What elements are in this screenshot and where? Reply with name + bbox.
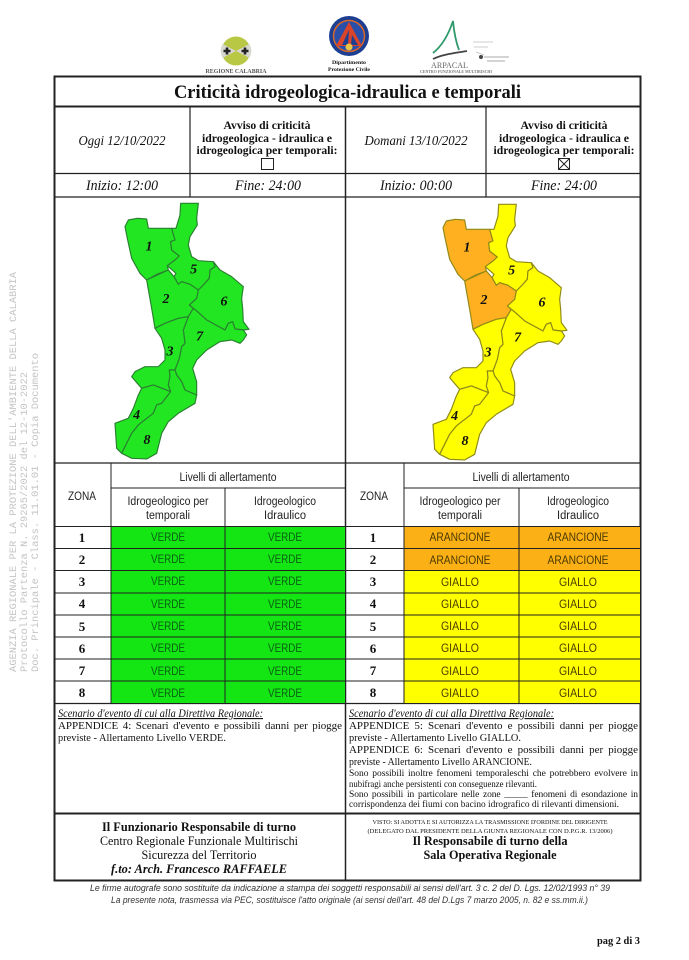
level values: hydrogeological for storms: VERDE [151, 554, 185, 566]
zone numbers: 3 [370, 574, 377, 589]
level values: hydrogeological for storms: VERDE [151, 599, 185, 611]
level values: hydrogeological hydraulic: VERDE [268, 643, 302, 655]
level values: hydrogeological hydraulic: VERDE [268, 688, 302, 700]
level values: hydrogeological hydraulic: GIALLO [559, 621, 597, 633]
map: tomorrow, zones 1-2 orange, others yellow: 1 [463, 241, 470, 256]
panel: scenario tomorrow: nubifragi anche persistenti con conseguenze rilevanti. [349, 779, 537, 790]
zone numbers: 2 [370, 552, 376, 567]
panel: today header [78, 120, 338, 194]
zone numbers: 6 [79, 641, 86, 656]
map: today, all zones green: 2 [161, 292, 169, 307]
watermark: protocol stamp: Doc. Principale - Class. 11.01.01 - Copia Documento [30, 353, 42, 672]
notice: tomorrow: idrogeologica per temporali: [494, 145, 634, 157]
notice: today: Avviso di criticità [224, 120, 311, 132]
level values: hydrogeological for storms: GIALLO [441, 621, 479, 633]
notice: tomorrow: idrogeologica - idraulica e [499, 133, 629, 145]
zone numbers: 5 [79, 619, 86, 634]
table header: Livelli di allertamento [472, 472, 570, 484]
watermark: protocol stamp [8, 271, 42, 672]
notice: today: idrogeologica per temporali: [196, 145, 338, 157]
panel: signature left: Centro Regionale Funzionale Multirischi [100, 834, 299, 848]
level values: hydrogeological hydraulic: GIALLO [559, 577, 597, 589]
panel: signature right: Sala Operativa Regionale [424, 848, 557, 862]
panel: scenario tomorrow: corrispondenza dei fiumi con bacino idrografico di rilevanti dimensioni. [349, 799, 619, 810]
panel: scenario tomorrow: previste - Allertamento Livello GIALLO. [349, 732, 521, 744]
map: tomorrow, zones 1-2 orange, others yellow: 3 [483, 345, 491, 360]
end time: tomorrow: Fine: 24:00 [530, 178, 598, 194]
level values: hydrogeological hydraulic [548, 532, 609, 700]
panel: signature right [368, 819, 612, 862]
date: today: Oggi 12/10/2022 [78, 133, 166, 148]
table header: Idraulico [264, 510, 306, 522]
logo: ARPACAL: CENTRO FUNZIONALE MULTIRISCHI [420, 69, 492, 74]
footnote [90, 883, 611, 906]
panel: scenario tomorrow: Scenario d'evento di cui alla Direttiva Regionale: [349, 708, 554, 720]
panel: signature right: Il Responsabile di turno della [412, 834, 568, 848]
map: tomorrow, zones 1-2 orange, others yellow [433, 204, 567, 460]
table header: Idrogeologico [547, 496, 609, 508]
logo: ARPACAL: ARPACAL [431, 61, 468, 70]
map: tomorrow, zones 1-2 orange, others yellow: 6 [538, 296, 545, 311]
date: tomorrow: Domani 13/10/2022 [364, 133, 468, 148]
level values: hydrogeological for storms: GIALLO [441, 643, 479, 655]
level values: hydrogeological for storms: VERDE [151, 576, 185, 588]
map: today, all zones green: 5 [190, 263, 197, 278]
level values: hydrogeological hydraulic: GIALLO [559, 666, 597, 678]
map: today, all zones green [115, 203, 249, 459]
logo: Regione Calabria: REGIONE CALABRIA [206, 68, 267, 75]
page number: pag 2 di 3 [597, 936, 640, 947]
panel: scenario tomorrow [349, 708, 638, 810]
table: tomorrow alert levels [345, 463, 640, 703]
level values: hydrogeological for storms: VERDE [151, 532, 185, 544]
level values: hydrogeological hydraulic: GIALLO [559, 599, 597, 611]
panel: signature left: Sicurezza del Territorio [142, 848, 256, 862]
panel: scenario tomorrow: Sono possibili inoltre fenomeni temporaleschi che potrebbero evolvere in [349, 768, 638, 779]
level values: hydrogeological hydraulic: VERDE [268, 532, 302, 544]
panel: scenario today: Scenario d'evento di cui alla Direttiva Regionale: [58, 708, 263, 720]
notice: tomorrow: Avviso di criticità [520, 120, 608, 132]
level values: hydrogeological for storms: ARANCIONE [430, 555, 491, 567]
map: tomorrow, zones 1-2 orange, others yellow: 7 [514, 330, 522, 345]
panel: scenario today [58, 708, 342, 744]
start time: today: Inizio: 12:00 [85, 178, 159, 194]
level values: hydrogeological hydraulic: VERDE [268, 599, 302, 611]
level values: hydrogeological hydraulic: VERDE [268, 666, 302, 678]
level values: hydrogeological hydraulic: ARANCIONE [548, 555, 609, 567]
level values: hydrogeological for storms: VERDE [151, 621, 185, 633]
notice: today: idrogeologica - idraulica e [202, 133, 332, 145]
level values: hydrogeological for storms: GIALLO [441, 599, 479, 611]
level values: hydrogeological for storms: ARANCIONE [430, 532, 491, 544]
zone numbers: 4 [370, 596, 377, 611]
level values: hydrogeological hydraulic: ARANCIONE [548, 532, 609, 544]
level values: hydrogeological hydraulic: GIALLO [559, 688, 597, 700]
panel: scenario tomorrow: APPENDICE 5: Scenari d'evento e possibili danni per piogge [349, 720, 638, 732]
zone numbers: 8 [370, 685, 377, 700]
panel: signature right: (DELEGATO DAL PRESIDENTE DELLA GIUNTA REGIONALE CON D.P.G.R. 13/2006) [368, 828, 612, 835]
table header: temporali [438, 510, 482, 522]
level values: hydrogeological for storms: GIALLO [441, 577, 479, 589]
map: today, all zones green: 7 [196, 329, 204, 344]
panel: scenario today: previste - Allertamento Livello VERDE. [58, 732, 226, 744]
level values: hydrogeological for storms: GIALLO [441, 688, 479, 700]
level values: hydrogeological hydraulic: GIALLO [559, 643, 597, 655]
table header: ZONA [360, 489, 388, 503]
table header: Livelli di allertamento [180, 472, 276, 484]
table header [68, 472, 316, 522]
zone numbers: 3 [79, 574, 86, 589]
zone numbers [79, 530, 86, 700]
level values: hydrogeological for storms: VERDE [151, 688, 185, 700]
logo: Dipartimento Protezione Civile: Protezione Civile [328, 67, 371, 73]
zone numbers: 8 [79, 685, 86, 700]
end time: today: Fine: 24:00 [234, 178, 302, 194]
table header [360, 472, 609, 522]
logo: Dipartimento Protezione Civile [328, 16, 371, 73]
zone numbers: 1 [79, 530, 85, 545]
zone numbers: 4 [79, 596, 86, 611]
panel: tomorrow header [364, 120, 634, 194]
level values: hydrogeological for storms: VERDE [151, 643, 185, 655]
zone numbers: 5 [370, 619, 377, 634]
level values: hydrogeological hydraulic [268, 532, 302, 700]
zone numbers: 7 [79, 663, 86, 678]
footnote: Le firme autografe sono sostituite da indicazione a stampa dei soggetti responsabili ai sensi dell'art. 3 c. 2 del D. Lgs. 12/02/1993 n° 39 [90, 883, 611, 894]
level values: hydrogeological for storms [430, 532, 491, 700]
panel: signature left: f.to: Arch. Francesco RAFFAELE [111, 861, 287, 876]
zone numbers: 1 [370, 530, 376, 545]
map: today, all zones green: 3 [165, 344, 173, 359]
watermark: protocol stamp: Protocollo Partenza N. 29265/2022 del 12-10-2022 [19, 372, 31, 672]
logo: Dipartimento Protezione Civile: Dipartimento [332, 60, 366, 66]
level values: hydrogeological hydraulic: VERDE [268, 554, 302, 566]
start time: tomorrow: Inizio: 00:00 [379, 178, 453, 194]
level values: hydrogeological for storms [151, 532, 185, 700]
map: today, all zones green: 6 [220, 295, 227, 310]
panel: scenario tomorrow: previste - Allertamento Livello ARANCIONE. [349, 756, 532, 768]
table header: Idrogeologico per [128, 496, 209, 508]
map: today, all zones green: 4 [132, 408, 140, 423]
level values: hydrogeological for storms: VERDE [151, 666, 185, 678]
table header: Idraulico [557, 510, 599, 522]
logo: Regione Calabria [206, 36, 267, 75]
logo: ARPACAL [420, 21, 509, 74]
map: tomorrow, zones 1-2 orange, others yellow: 5 [508, 264, 515, 279]
table header: ZONA [68, 489, 96, 503]
watermark: protocol stamp: AGENZIA REGIONALE PER LA PROTEZIONE DELL'AMBIENTE DELLA CALABRIA [8, 271, 20, 672]
zone numbers [370, 530, 377, 700]
map: today, all zones green: 1 [145, 240, 152, 255]
panel: signature left [100, 820, 299, 876]
map: tomorrow, zones 1-2 orange, others yellow: 4 [450, 409, 458, 424]
notice: today [196, 120, 338, 170]
map: tomorrow, zones 1-2 orange, others yellow: 2 [479, 293, 487, 308]
table: today alert levels [54, 463, 345, 703]
notice: tomorrow [494, 120, 634, 170]
level values: hydrogeological hydraulic: VERDE [268, 621, 302, 633]
level values: hydrogeological for storms: GIALLO [441, 666, 479, 678]
level values: hydrogeological hydraulic: VERDE [268, 576, 302, 588]
panel: scenario tomorrow: Sono possibili in particolare nelle zone _____ fenomeni di esondazione in [349, 789, 638, 800]
table header: Idrogeologico per [420, 496, 501, 508]
zone numbers: 7 [370, 663, 377, 678]
zone numbers: 6 [370, 641, 377, 656]
zone numbers: 2 [79, 552, 85, 567]
footnote: La presente nota, trasmessa via PEC, sostituisce l'atto originale (ai sensi dell'art. 48 del D.Lgs 7 marzo 2005, n. 82 e ss.mm.ii.) [111, 895, 588, 906]
panel: scenario tomorrow: APPENDICE 6: Scenari d'evento e possibili danni per piogge [349, 744, 638, 756]
panel: signature right: VISTO: SI ADOTTA E SI AUTORIZZA LA TRASMISSIONE D'ORDINE DEL DIRIGENTE [372, 819, 608, 826]
panel: signature left: Il Funzionario Responsabile di turno [102, 820, 296, 834]
map: today, all zones green: 8 [143, 433, 150, 448]
panel: scenario today: APPENDICE 4: Scenari d'evento e possibili danni per piogge [58, 720, 342, 732]
title: Criticità idrogeologica-idraulica e temporali [174, 83, 521, 103]
table header: Idrogeologico [254, 496, 316, 508]
panel: bulletin frame [54, 76, 640, 880]
map: tomorrow, zones 1-2 orange, others yellow: 8 [461, 434, 468, 449]
table header: temporali [146, 510, 190, 522]
